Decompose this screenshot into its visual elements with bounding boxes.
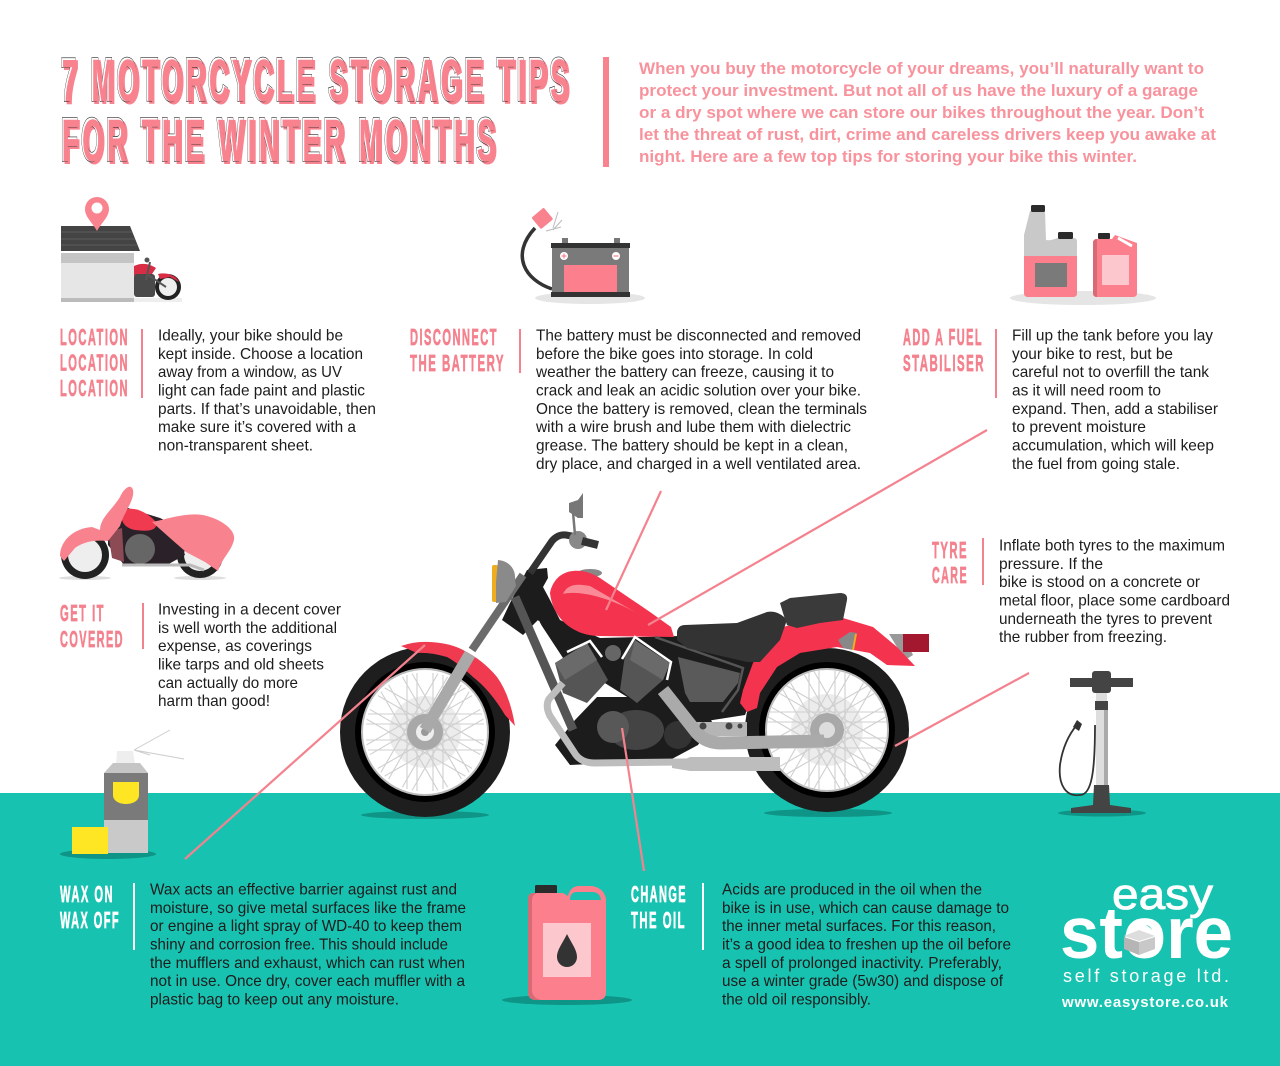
intro text: or a dry spot where we can store our bikes throughout the year. Don’t [639,103,1204,122]
tip text: fuel stabiliser: Fill up the tank before you lay [1012,328,1213,344]
tip text: change the oil: Acids are produced in the oil when the [722,882,982,898]
tip text: location: parts. If that’s unavoidable, then [158,401,376,418]
tip text: change the oil [722,882,1011,1008]
tip text: location: Ideally, your bike should be [158,328,343,344]
tip text: get it covered: Investing in a decent cover [158,602,341,618]
tip text: fuel stabiliser: expand. Then, add a stabiliser [1012,401,1218,418]
tip text: get it covered: like tarps and old sheets [158,656,324,674]
infographic canvas: LOCATION [60,324,129,350]
tip heading: disconnect the battery: DISCONNECT [410,324,498,350]
tip text: get it covered [158,602,341,710]
headlight [492,565,498,602]
logo: easy store self storage: easy [1112,870,1213,919]
tip text: tyre care: pressure. If the [999,556,1103,573]
infographic canvas: TYRE [932,537,968,563]
tip text: disconnect the battery: with a wire brush and lube them with dielectric [535,419,851,436]
logo: easy store self storage: www.easystore.co.uk [1061,994,1229,1011]
tip heading: disconnect the battery [410,324,505,376]
infographic canvas: 7 MOTORCYCLE STORAGE TIPS [61,47,571,113]
seats [677,612,787,662]
tip text: disconnect the battery: dry place, and charged in a well ventilated area. [536,456,861,473]
infographic canvas: 7 MOTORCYCLE STORAGE TIPS [64,50,574,116]
tip text: change the oil: bike is in use, which can cause damage to [722,900,1009,917]
tip text: fuel stabiliser: accumulation, which will keep [1012,438,1214,454]
front fork [425,654,470,730]
tip text: tyre care: the rubber from freezing. [999,629,1167,646]
tip text: disconnect the battery: weather the battery can freeze, causing it to [535,364,834,381]
tip text: tyre care: underneath the tyres to prevent [999,611,1213,628]
tip text: disconnect the battery [535,328,867,473]
tip text: wax on wax off: the mufflers and exhaust, which can rust when [150,955,465,972]
tip heading: location [60,324,129,401]
logo: easy store self storage [1060,870,1233,1011]
tip heading: wax on wax off: WAX ON [60,881,114,907]
rear fender [740,618,915,712]
tip heading: change the oil [631,881,687,933]
logo: easy store self storage: store [1060,893,1233,974]
tip text: wax on wax off: or engine a light spray of WD-40 to keep them [150,918,462,935]
tip heading: change the oil: THE OIL [631,907,686,933]
tip text: location [158,328,376,454]
tip text: fuel stabiliser: as it will need room to [1012,382,1161,400]
infographic canvas: WAX OFF [60,907,120,933]
tip text: tyre care: metal floor, place some cardboard [999,592,1230,610]
tip text: tyre care [999,538,1230,646]
tip text: wax on wax off: moisture, so give metal surfaces like the frame [150,900,466,917]
tip text: tyre care: bike is stood on a concrete or [999,574,1200,591]
title [61,47,574,176]
icon: tyre pump [1058,671,1146,816]
intro text: night. Here are a few top tips for storing your bike this winter. [639,147,1137,166]
tip text: get it covered: can actually do more [158,675,298,692]
tip text: fuel stabiliser: the fuel from going stale. [1012,456,1180,473]
tip text: fuel stabiliser: careful not to overfill the tank [1012,364,1209,381]
tip text: change the oil: it’s a good idea to freshen up the oil before [722,936,1011,954]
tip text: change the oil: the inner metal surfaces. For this reason, [722,918,996,935]
fuel tank [578,569,602,577]
callout lines [185,430,1029,871]
tip text: location: light can fade paint and plastic [158,382,365,400]
taillight [889,634,913,660]
motorcycle illustration [340,493,929,819]
tip text: change the oil: the old oil responsibly. [722,992,871,1008]
intro text: protect your investment. But not all of us have the luxury of a garage [639,81,1198,100]
title: FOR THE WINTER MONTHS [61,107,498,173]
tip text: fuel stabiliser [1012,328,1218,473]
infographic canvas: CHANGE [631,881,687,907]
rear wheel [745,648,909,817]
icon: wax spray can and sponge [60,730,184,859]
tip heading: tyre care [932,537,968,588]
title: FOR THE WINTER MONTHS [61,107,498,173]
icon: fuel stabiliser bottles [1010,205,1156,305]
tip text: wax on wax off: shiny and corrosion free. This should include [150,936,448,954]
tip text: disconnect the battery: The battery must be disconnected and removed [536,328,861,344]
tip text: get it covered: harm than good! [158,693,270,710]
title: FOR THE WINTER MONTHS [62,108,499,174]
tip text: location: make sure it’s covered with a [158,419,356,436]
icon: covered motorcycle [59,487,234,580]
front wheel [340,647,510,819]
tip text: location: away from a window, as UV [158,364,343,381]
tip heading: get it covered [60,600,124,652]
tip text: wax on wax off [150,882,466,1008]
tip text: wax on wax off: not in use. Once dry, cover each muffler with a [150,973,465,990]
infographic canvas: ADD A FUEL [903,324,983,350]
crankcase [555,697,712,765]
infographic canvas: COVERED [60,626,124,652]
teal floor band [0,793,1280,1066]
infographic canvas: THE BATTERY [410,350,505,376]
tip heading: wax on wax off [60,881,120,933]
cylinders [555,643,608,703]
infographic canvas: LOCATION [60,350,129,376]
icon: garage with location pin [61,197,182,302]
title divider [603,57,609,167]
tip text: wax on wax off: plastic bag to keep out any moisture. [150,992,399,1008]
infographic canvas: 7 MOTORCYCLE STORAGE TIPS [61,47,571,113]
tip heading: get it covered: GET IT [60,600,105,626]
tip text: tyre care: Inflate both tyres to the maximum [999,538,1225,554]
tip text: location: kept inside. Choose a location [158,346,363,363]
black frame [502,568,770,722]
tip text: change the oil: use a winter grade (5w30) and dispose of [722,973,1004,990]
tip text: disconnect the battery: crack and leak an acidic solution over your bike. [536,382,861,400]
intro text: let the threat of rust, dirt, crime and careless drivers keep you awake at [639,125,1216,144]
icon: car battery [522,207,645,304]
tip text: disconnect the battery: grease. The battery should be kept in a clean, [536,438,848,454]
exhaust pipes [547,683,780,763]
infographic canvas: STABILISER [903,350,985,376]
tip text: location: non-transparent sheet. [158,438,313,454]
logo: easy store self storage: self storage ltd. [1063,966,1229,986]
intro text [639,59,1216,166]
tip text: get it covered: expense, as coverings [158,638,312,655]
icon: oil jerrycan [502,885,632,1005]
infographic canvas: 7 MOTORCYCLE STORAGE TIPS [62,48,572,114]
infographic canvas: LOCATION [60,375,129,401]
tip heading: add a fuel stabiliser [903,324,985,376]
tip text: wax on wax off: Wax acts an effective barrier against rust and [150,882,457,898]
tip text: disconnect the battery: Once the battery is removed, clean the terminals [536,401,867,418]
tip text: disconnect the battery: before the bike goes into storage. In cold [536,346,813,363]
tip text: get it covered: is well worth the additional [158,620,337,637]
infographic canvas: CARE [932,562,968,588]
tip text: fuel stabiliser: to prevent moisture [1012,419,1146,436]
tip text: fuel stabiliser: your bike to rest, but be [1012,346,1173,363]
side panel [678,657,740,702]
intro text: When you buy the motorcycle of your dreams, you’ll naturally want to [639,59,1204,78]
tip text: change the oil: a spell of prolonged inactivity. Preferably, [722,955,1002,972]
handlebar and mirror [530,535,577,573]
title: FOR THE WINTER MONTHS [64,110,500,176]
front fender [401,642,515,726]
